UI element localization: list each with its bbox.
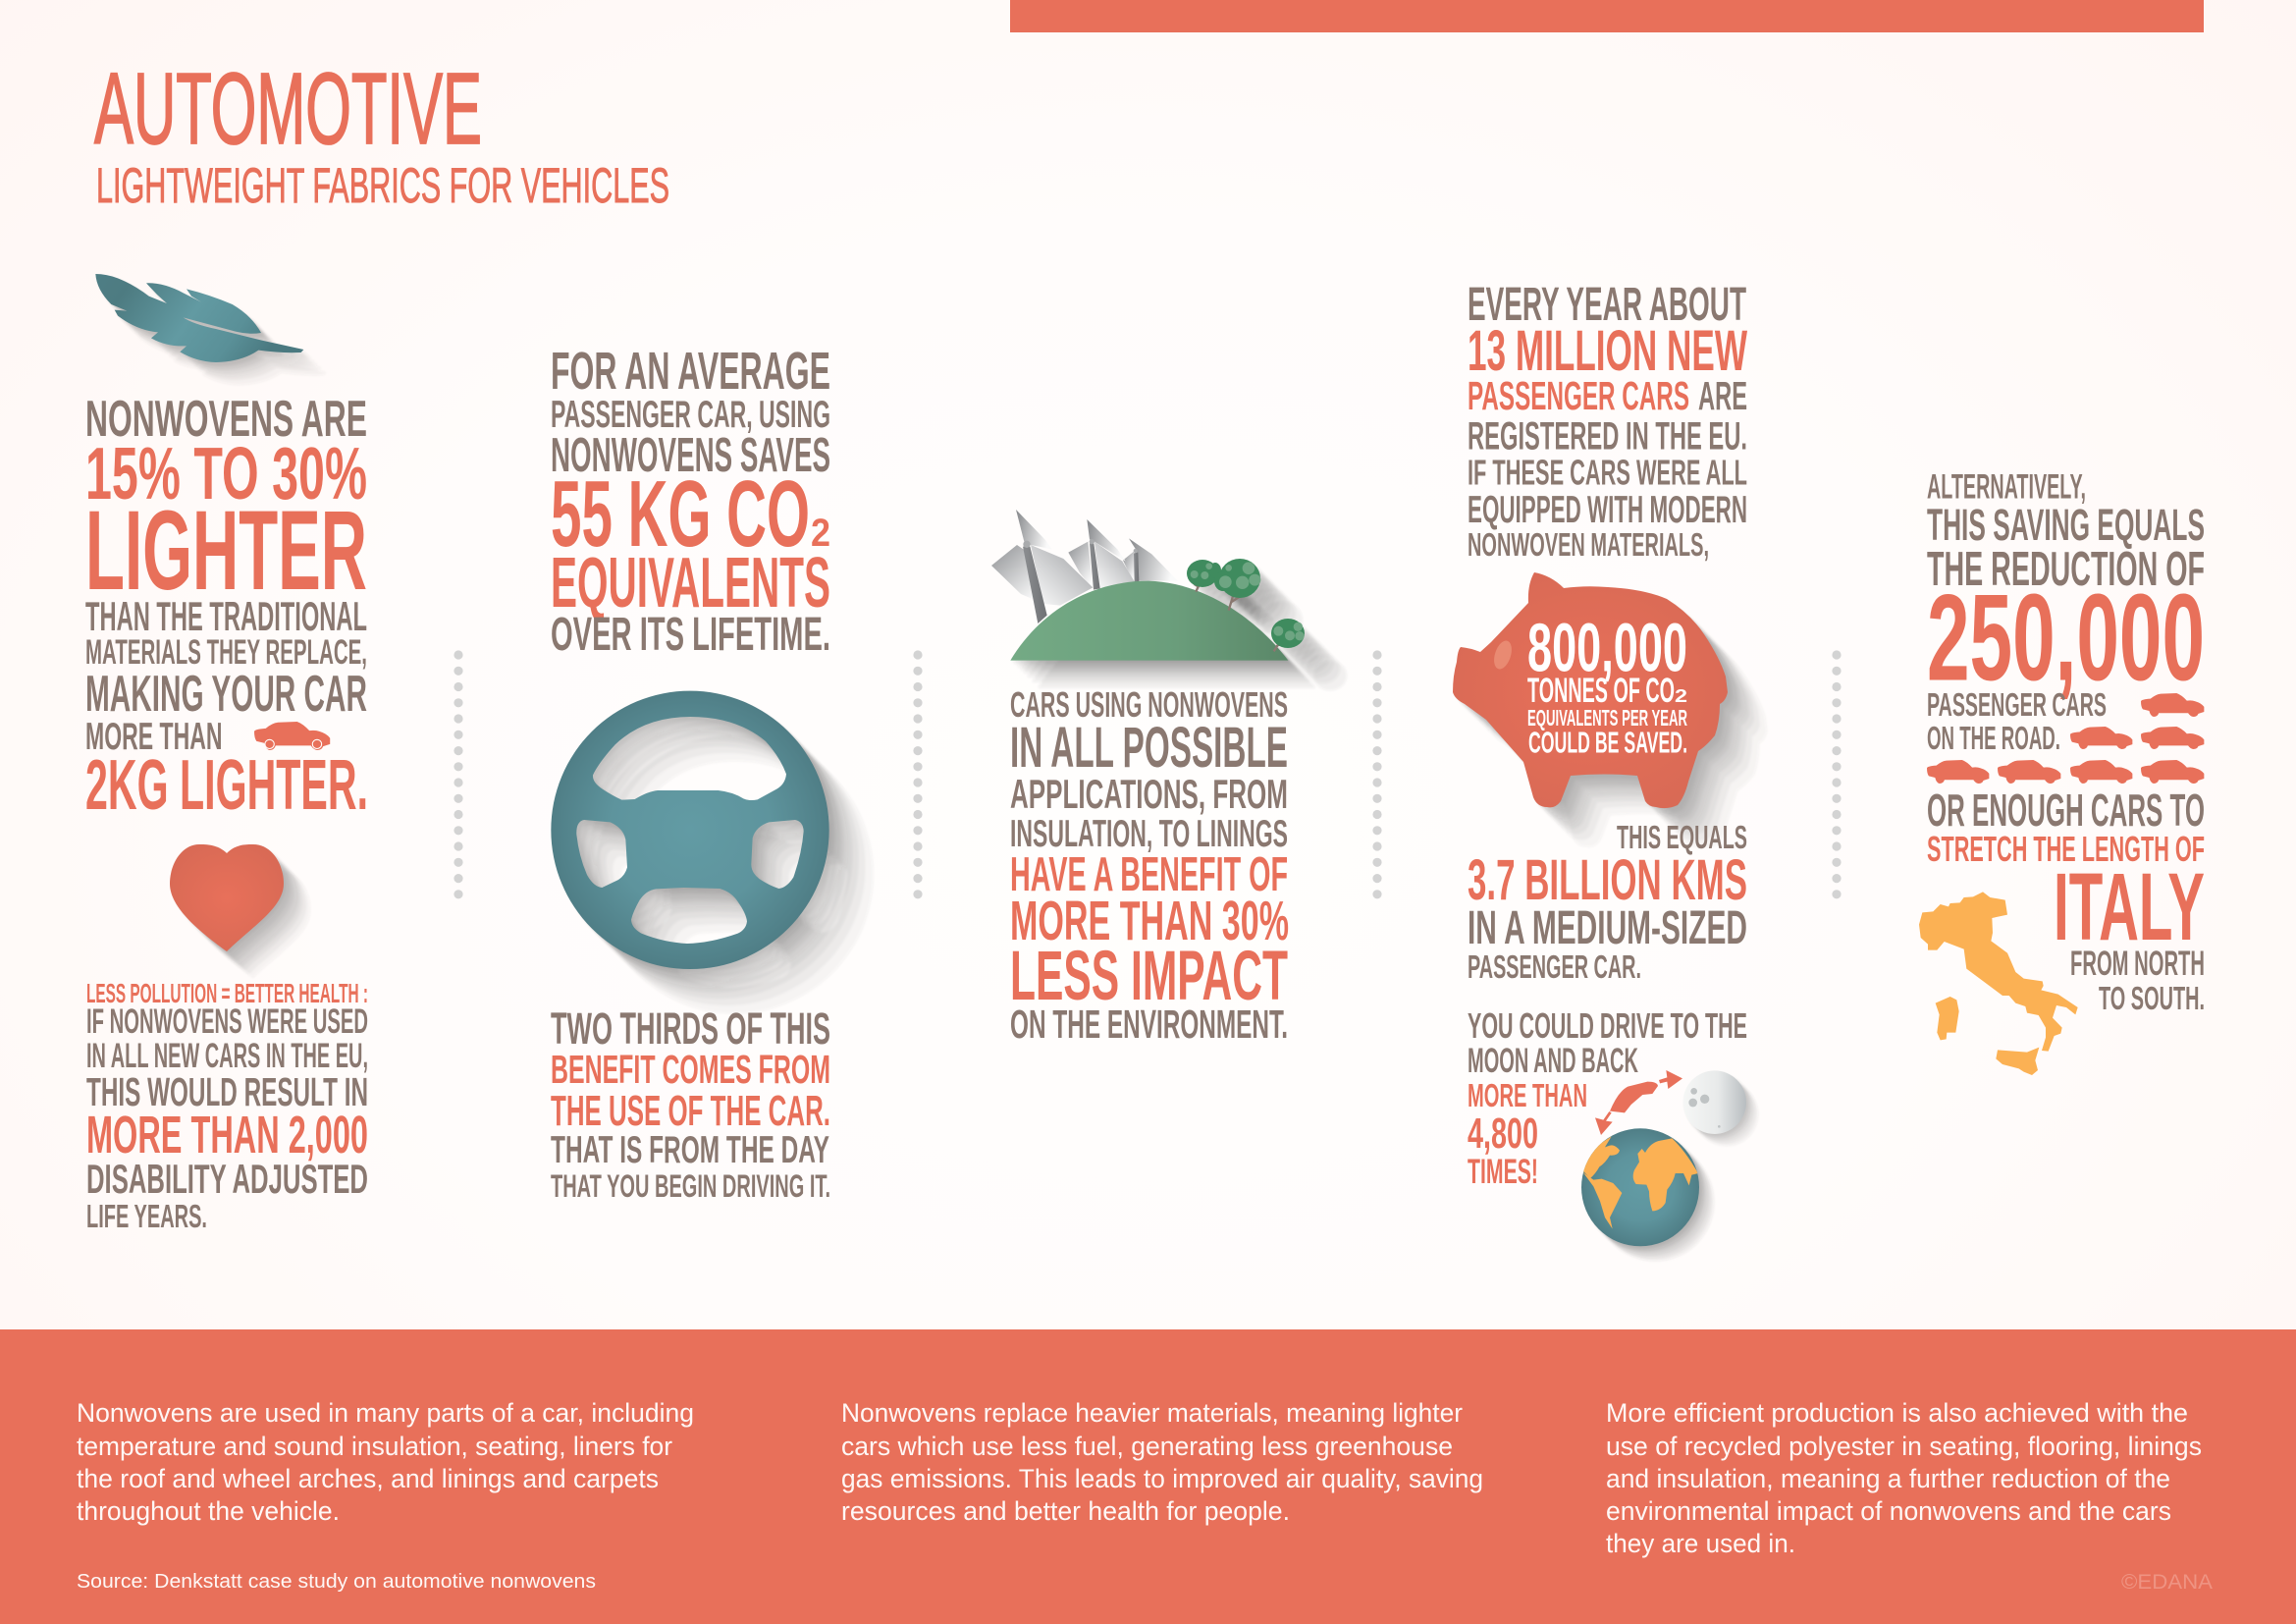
text: better health: THIS WOULD RESULT IN [86, 1069, 368, 1114]
text: less impact: CARS USING NONWOVENS [1010, 684, 1288, 725]
footer text: column 3: use of recycled polyester in seating, flooring, linings [1606, 1432, 2202, 1461]
footer band [0, 1329, 2296, 1624]
text: better health: IF NONWOVENS WERE USED [86, 1002, 368, 1041]
text: nonwovens are lighter: THAN THE TRADITIONAL [85, 593, 367, 639]
footer text: column 1: Nonwovens are used in many parts of a car, including [77, 1398, 694, 1428]
dotted divider [1832, 650, 1842, 898]
text: 250,000 passenger cars: ALTERNATIVELY, [1927, 467, 2086, 507]
footer text: column 2: Nonwovens replace heavier materials, meaning lighter [841, 1398, 1463, 1428]
copyright: ©EDANA [2121, 1571, 2213, 1594]
text: less impact: LESS IMPACT [1010, 938, 1288, 1015]
text: length of Italy [1927, 785, 2205, 1017]
footer text: column 1 [77, 1398, 694, 1526]
text: 800,000 tonnes: EQUIVALENTS PER YEAR [1527, 705, 1687, 731]
icon: piggy bank [1453, 572, 1767, 847]
icon: map of Italy [1919, 892, 2078, 1075]
text: benefit of use: THAT YOU BEGIN DRIVING IT. [551, 1168, 830, 1204]
text: benefit of use: BENEFIT COMES FROM [551, 1047, 830, 1092]
icon: return-trip arrow [1595, 1070, 1682, 1135]
text: less impact [1010, 684, 1289, 1047]
dotted divider [913, 650, 923, 898]
panel: lighter materials [85, 274, 368, 1235]
text: moon and back [1468, 1005, 1747, 1191]
text: CO2 saving: NONWOVENS SAVES [551, 429, 830, 482]
icon: feather [95, 274, 326, 385]
panel: CO2 savings [551, 342, 874, 1204]
footer text: column 3: they are used in. [1606, 1529, 1795, 1558]
text: CO2 saving: OVER ITS LIFETIME. [551, 609, 830, 661]
footer text: column 1: the roof and wheel arches, and linings and carpets [77, 1464, 659, 1493]
footer text: column 3 [1606, 1398, 2202, 1558]
text: less impact: MORE THAN 30% [1010, 891, 1289, 952]
text: moon and back: 4,800 [1468, 1110, 1538, 1158]
text: less impact: APPLICATIONS, FROM [1010, 771, 1288, 817]
text: nonwovens are lighter: LIGHTER [85, 488, 367, 614]
footer text: column 3: and insulation, meaning a further reduction of the [1606, 1464, 2170, 1493]
text: nonwovens are lighter: MAKING YOUR CAR [85, 666, 367, 723]
text: moon and back: MORE THAN [1468, 1078, 1587, 1114]
text: 800,000 tonnes: 800,000 [1527, 609, 1687, 685]
text: new passenger cars: EVERY YEAR ABOUT [1468, 279, 1746, 331]
text: 800,000 tonnes: COULD BE SAVED. [1528, 727, 1687, 760]
text: 800,000 tonnes: 2 [1675, 686, 1687, 706]
text: new passenger cars: 13 MILLION NEW [1468, 319, 1747, 383]
text: benefit of use: THAT IS FROM THE DAY [551, 1129, 829, 1171]
icon: earth [1581, 1128, 1714, 1261]
text: moon and back: YOU COULD DRIVE TO THE [1468, 1005, 1747, 1046]
dotted divider [1372, 650, 1382, 898]
top accent bar [1010, 0, 2204, 32]
text: nonwovens are lighter: NONWOVENS ARE [85, 391, 367, 448]
text: benefit of use: THE USE OF THE CAR. [551, 1088, 830, 1135]
text: moon and back: MOON AND BACK [1468, 1042, 1638, 1080]
text: less impact: HAVE A BENEFIT OF [1010, 847, 1288, 901]
icon: hill with wind turbines and trees [991, 510, 1347, 690]
source line: Source: Denkstatt case study on automotive nonwovens [77, 1570, 596, 1593]
icon: car [254, 722, 330, 750]
tree shadows [1191, 563, 1347, 690]
text: billion kms: PASSENGER CAR. [1468, 949, 1641, 986]
text: 250,000 passenger cars [1927, 467, 2205, 757]
hill shadow [1012, 583, 1315, 688]
text: new passenger cars [1468, 279, 1747, 564]
text: new passenger cars: PASSENGER CARS [1468, 373, 1689, 418]
text: billion kms: THIS EQUALS [1617, 820, 1747, 856]
subtitle: LIGHTWEIGHT FABRICS FOR VEHICLES [96, 158, 669, 213]
icons: row of cars [1927, 693, 2204, 784]
header [94, 52, 669, 213]
icon: moon [1682, 1070, 1758, 1146]
text: less impact: INSULATION, TO LININGS [1010, 813, 1288, 855]
text: CO2 saving: EQUIVALENTS [551, 543, 830, 623]
icon: steering wheel [551, 691, 874, 1013]
text: CO2 saving: PASSENGER CAR, USING [551, 394, 830, 436]
panel: environmental impact [991, 510, 1347, 1047]
text: nonwovens are lighter: MORE THAN [85, 716, 222, 758]
text: new passenger cars: REGISTERED IN THE EU. [1468, 414, 1747, 458]
footer text: column 1: throughout the vehicle. [77, 1496, 340, 1526]
text: billion kms: 3.7 BILLION KMS [1468, 848, 1747, 912]
text: 250,000 passenger cars: PASSENGER CARS [1927, 687, 2107, 724]
text: CO2 saving: 55 KG CO [551, 461, 810, 567]
text: new passenger cars: IF THESE CARS WERE ALL [1468, 452, 1747, 493]
footer text: column 1: temperature and sound insulation, seating, liners for [77, 1432, 672, 1461]
text: nonwovens are lighter: MATERIALS THEY REPLACE, [85, 632, 367, 672]
text: 800,000 tonnes [1527, 609, 1687, 760]
text: nonwovens are lighter: 2KG LIGHTER. [85, 745, 368, 825]
footer text: column 3: More efficient production is also achieved with the [1606, 1398, 2188, 1428]
text: less impact: IN ALL POSSIBLE [1010, 716, 1288, 780]
footer text: column 2 [841, 1398, 1483, 1526]
dotted divider [454, 650, 463, 898]
text: nonwovens are lighter [85, 391, 368, 825]
text: 800,000 tonnes: TONNES OF CO [1527, 672, 1675, 710]
text: billion kms: IN A MEDIUM-SIZED [1468, 902, 1747, 954]
text: better health: DISABILITY ADJUSTED [86, 1156, 368, 1202]
text: new passenger cars: ARE [1698, 373, 1747, 418]
trees [1187, 559, 1305, 651]
title: AUTOMOTIVE [94, 52, 482, 165]
text: better health: IN ALL NEW CARS IN THE EU, [86, 1037, 368, 1075]
text: benefit of use: TWO THIRDS OF THIS [551, 1003, 830, 1054]
icon: heart [170, 844, 310, 978]
text: better health: LESS POLLUTION = BETTER HEALTH : [86, 978, 368, 1008]
text: CO2 saving: 2 [811, 512, 830, 555]
text: billion kms [1468, 820, 1747, 986]
text: nonwovens are lighter: 15% TO 30% [85, 433, 367, 515]
hill [1010, 581, 1288, 661]
footer text: column 2: resources and better health for people. [841, 1496, 1290, 1526]
wind turbines [991, 510, 1178, 623]
panel: 250,000 cars and Italy [1919, 467, 2205, 1075]
text: less impact: ON THE ENVIRONMENT. [1010, 1001, 1288, 1047]
text: new passenger cars: NONWOVEN MATERIALS, [1468, 527, 1709, 564]
text: better health: MORE THAN 2,000 [86, 1106, 368, 1164]
text: CO2 saving: FOR AN AVERAGE [551, 342, 830, 401]
panel: new cars in the EU [1453, 279, 1767, 1261]
footer text: column 2: cars which use less fuel, generating less greenhouse [841, 1432, 1453, 1461]
text: benefit of use [551, 1003, 830, 1204]
text: moon and back: TIMES! [1468, 1153, 1538, 1191]
text: 250,000 passenger cars: ON THE ROAD. [1927, 721, 2060, 757]
text: better health: LIFE YEARS. [86, 1199, 207, 1235]
text: length of Italy: TO SOUTH. [2099, 981, 2205, 1017]
text: new passenger cars: EQUIPPED WITH MODERN [1468, 489, 1747, 531]
footer text: column 3: environmental impact of nonwovens and the cars [1606, 1496, 2171, 1526]
footer text: column 2: gas emissions. This leads to improved air quality, saving [841, 1464, 1483, 1493]
text: better health [86, 978, 368, 1235]
text: CO2 saving [551, 342, 830, 661]
